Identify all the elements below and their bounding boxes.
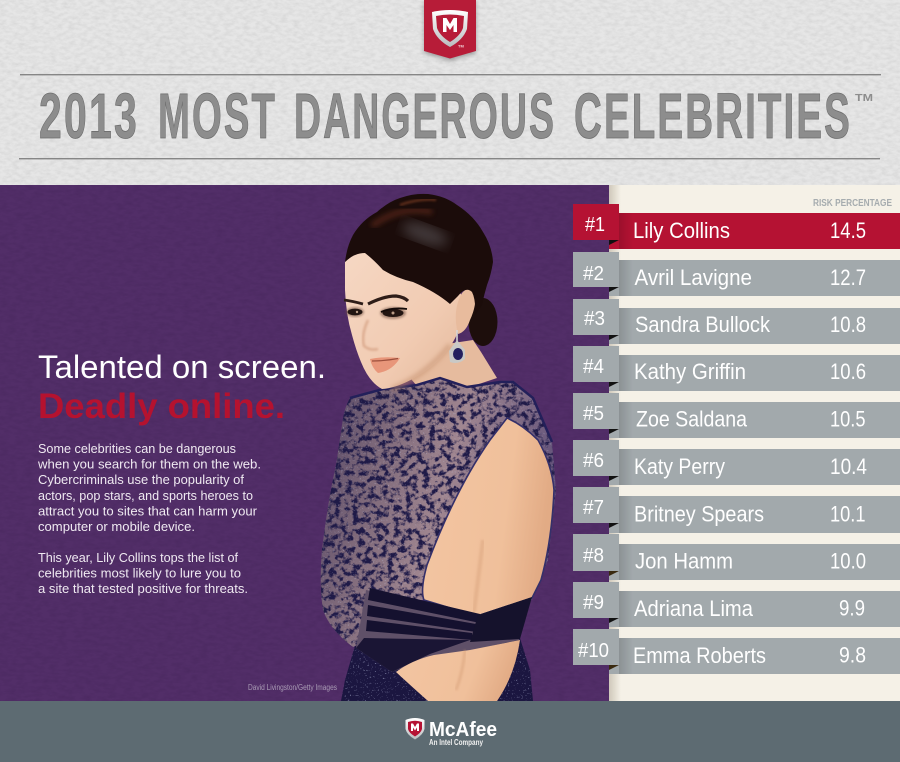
- hair: [345, 194, 493, 315]
- text block: intro: when you search for them on the web.: [37, 456, 261, 472]
- row 3: Sandra Bullock: Sandra Bullock: [635, 312, 771, 337]
- row 6: Katy Perry: Katy Perry: [634, 454, 725, 479]
- text block: intro: Some celebrities can be dangerous: [38, 441, 236, 456]
- lower spine shading: [456, 650, 465, 690]
- row 10: Emma Roberts: Emma Roberts: [633, 643, 766, 668]
- row 9: Adriana Lima: 9.9: [839, 596, 865, 620]
- icon: McAfee ribbon with shield: [424, 0, 476, 61]
- header paper background: [0, 0, 900, 185]
- row 9: Adriana Lima: [573, 582, 900, 627]
- heading: deadly online: Deadly online.: [38, 387, 285, 426]
- row 1: Lily Collins: [573, 204, 900, 249]
- row 9: Adriana Lima: Adriana Lima: [634, 596, 754, 621]
- row 10: Emma Roberts: [573, 629, 900, 674]
- row 4: Kathy Griffin: Kathy Griffin: [634, 359, 746, 384]
- title rule top: [20, 74, 881, 75]
- woman photo: [315, 194, 560, 705]
- row 6: Katy Perry: [573, 440, 900, 485]
- title: TM: [855, 93, 873, 104]
- text block: intro: [37, 441, 261, 534]
- face: [345, 245, 466, 389]
- row 6: Katy Perry: 10.4: [830, 454, 867, 479]
- bare back: [423, 418, 554, 616]
- footer logo: McAfee: [406, 718, 497, 747]
- row 2: Avril Lavigne: Avril Lavigne: [634, 265, 752, 290]
- neck and shoulder skin: [405, 340, 497, 388]
- spine shading: [474, 540, 483, 612]
- dress skirt: [341, 638, 533, 701]
- text block: this year: celebrities most likely to lure you to: [38, 566, 241, 580]
- hair highlights: [372, 200, 451, 251]
- lips: [370, 357, 400, 373]
- row 1: Lily Collins: Lily Collins: [633, 218, 730, 243]
- row 2: Avril Lavigne: 12.7: [830, 265, 866, 290]
- row 5: Zoe Saldana: [573, 393, 900, 438]
- row 8: Jon Hamm: #8: [583, 545, 604, 567]
- text block: intro: actors, pop stars, and sports heroes to: [38, 488, 253, 503]
- title rule bottom: [19, 158, 880, 159]
- title: 2013: [39, 80, 139, 152]
- title: DANGEROUS: [294, 80, 556, 152]
- footer logo: McAfee: An Intel Company: [429, 738, 483, 747]
- lace sleeve and bodice: [315, 375, 560, 655]
- text block: intro: attract you to sites that can harm your: [38, 504, 258, 518]
- row 7: Britney Spears: [573, 487, 900, 533]
- row 1: Lily Collins: #1: [585, 214, 605, 236]
- text block: intro: Cybercriminals use the popularity of: [38, 472, 244, 487]
- text block: intro: computer or mobile device.: [38, 519, 195, 534]
- icon: McAfee ribbon with shield: TM: [458, 44, 464, 48]
- row 4: Kathy Griffin: #4: [583, 356, 604, 378]
- heading: talented on screen: Talented on screen.: [38, 349, 326, 385]
- row 2: Avril Lavigne: [573, 252, 900, 296]
- title: [39, 80, 873, 152]
- jaw shadow: [392, 345, 450, 389]
- lower back: [396, 640, 520, 701]
- row 9: Adriana Lima: #9: [583, 592, 604, 614]
- ear: [456, 288, 475, 334]
- row 8: Jon Hamm: 10.0: [830, 548, 866, 574]
- waist band: [356, 588, 532, 672]
- row 10: Emma Roberts: #10: [578, 640, 609, 662]
- row 3: Sandra Bullock: #3: [584, 308, 605, 330]
- row 5: Zoe Saldana: #5: [583, 403, 604, 425]
- eyes and brows: [344, 296, 408, 319]
- row 8: Jon Hamm: [573, 534, 900, 580]
- text block: this year: [38, 550, 248, 596]
- row 7: Britney Spears: 10.1: [830, 502, 866, 526]
- photo credit: David Livingston/Getty Images: [248, 683, 337, 692]
- row 7: Britney Spears: Britney Spears: [634, 502, 764, 526]
- row 4: Kathy Griffin: 10.6: [830, 359, 866, 384]
- row 4: Kathy Griffin: [573, 346, 900, 391]
- row 10: Emma Roberts: 9.8: [839, 642, 866, 668]
- footer band: [0, 701, 900, 762]
- title: MOST: [158, 80, 277, 152]
- panel: purple background: [0, 185, 610, 701]
- lace neckline: [350, 378, 552, 442]
- row 6: Katy Perry: #6: [583, 450, 604, 472]
- row 3: Sandra Bullock: [573, 299, 900, 344]
- row 5: Zoe Saldana: 10.5: [830, 406, 866, 432]
- text block: this year: a site that tested positive for threats.: [38, 581, 248, 596]
- row 3: Sandra Bullock: 10.8: [830, 312, 866, 337]
- footer logo: McAfee: McAfee: [429, 719, 497, 741]
- row 1: Lily Collins: 14.5: [830, 218, 866, 243]
- panel: ranking background: [609, 185, 900, 701]
- earring: [449, 330, 465, 363]
- nose shading: [363, 320, 378, 350]
- row 5: Zoe Saldana: Zoe Saldana: [636, 406, 748, 432]
- row 8: Jon Hamm: Jon Hamm: [635, 548, 733, 574]
- bun: [468, 298, 498, 346]
- text block: this year: This year, Lily Collins tops the list of: [38, 550, 238, 565]
- row 2: Avril Lavigne: #2: [583, 263, 604, 285]
- icon: shield: [406, 718, 424, 740]
- row 7: Britney Spears: #7: [583, 497, 604, 519]
